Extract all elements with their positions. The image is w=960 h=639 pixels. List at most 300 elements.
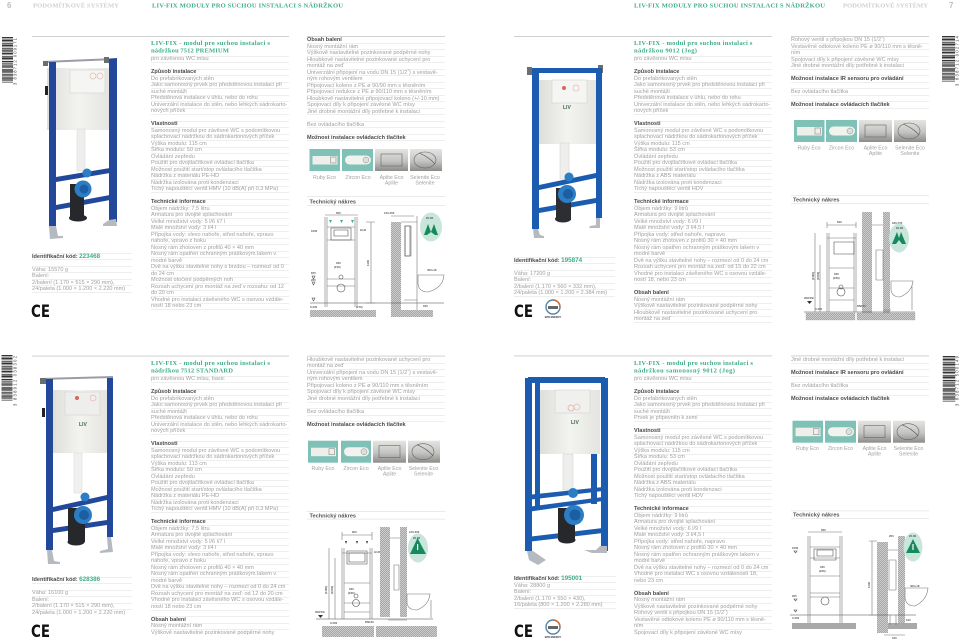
description column: Samonosný modul pro závěsné WC s podomítkovou	[151, 128, 280, 134]
identification block	[32, 570, 132, 616]
description column: Nádržka izolována proti kondenzaci	[151, 500, 239, 506]
barcode: 3 838712 002714	[954, 35, 960, 86]
certification badge	[545, 620, 562, 639]
package contents continued column: Hloubkově nastavitelné pozinkované uchycení pro	[307, 356, 430, 362]
description column: Způsob instalace	[151, 69, 196, 75]
description column: Malé množství vody: 3 l/4 l	[151, 225, 216, 231]
description column: Rohový ventil s připojkou DN 15 (1/2˝)	[634, 610, 728, 616]
heading: LIV-FIX - modul pro suchou instalaci s	[634, 360, 753, 367]
package contents continued column: Bez ovládacího tlačítka	[791, 89, 848, 95]
Selenite Eco: Selenite Eco	[895, 146, 925, 152]
technical drawing: 220	[311, 278, 316, 282]
technical drawing	[804, 212, 915, 320]
description column: Přípojka vody: vlevo nahoře, střed nahoře, vpravo	[151, 552, 273, 558]
identification block: Váha: 17200 g	[514, 270, 550, 276]
package contents continued column: Jiné drobné montážní díly potřebné k instalaci	[791, 63, 904, 69]
description column: montáž na zeď	[634, 316, 671, 322]
description column: Tichý napouštěcí ventil HMV (10 dB(A) při 0,3 MPa)	[151, 186, 278, 192]
identification block: Identifikační kód: 223468	[32, 252, 100, 260]
technical drawing: (1000)	[330, 586, 334, 594]
package contents column: Možnost instalace ovládacích tlačítek	[307, 134, 406, 140]
barcode: 3 838712 500149	[954, 355, 960, 406]
description column: Univerzální instalace do stěn, nebo lehkých sádrokarto-	[634, 102, 770, 108]
technical drawing heading: Technický nákres	[793, 513, 840, 519]
identification block: 16/paleta (800 × 1.200 × 2.280 mm)	[514, 602, 603, 608]
description column: Obsah balení	[151, 616, 186, 622]
panel: LIV-FIX 7512 STANDARD	[2, 355, 445, 639]
product image: mounting frame	[525, 377, 608, 565]
technical drawing heading	[791, 511, 929, 519]
description column: Velké množství vody: 6 l/9 l	[634, 526, 701, 532]
description column: Univerzální instalace do stěn, nebo lehkých sádrokarto-	[151, 422, 287, 428]
product image: mounting frame	[40, 376, 113, 564]
identification block: Identifikační kód: 195874	[514, 256, 582, 264]
description column: modré barvě	[634, 558, 665, 564]
description column: Přípojka vody: vlevo nahoře, střed nahoře, vpravo	[151, 232, 273, 238]
barcode	[7, 355, 18, 406]
description column: Nosný rám opatřen ochranným práškovým lakem v	[634, 244, 759, 250]
Selenite Eco	[893, 421, 925, 458]
technical drawing heading	[307, 511, 445, 520]
technical drawing: (≥70)	[356, 305, 363, 309]
product image: mounting frame: LIV	[79, 422, 87, 428]
package contents continued column: Možnost instalace IR sensoru pro ovládání	[791, 76, 904, 82]
identification block: 24/paleta (1.000 × 1.200 × 2.384 mm)	[514, 290, 607, 296]
Ruby Eco: Ruby Eco	[796, 446, 819, 452]
Ruby Eco: Ruby Eco	[312, 466, 335, 472]
description column: Objem nádržky: 9 litrů	[634, 512, 688, 518]
identification block: 2/balení (1.170 × 550 × 430),	[514, 596, 586, 602]
description column: Vhodné pro instalaci závěsného WC s osovou vzdále-	[151, 597, 284, 603]
Aplite Eco: Aplite Eco	[378, 466, 401, 472]
package contents column: Připojovací koleno z PE ø 90/90 mm s těsněním	[307, 82, 425, 88]
identification block	[32, 247, 132, 292]
heading	[634, 40, 753, 55]
technical drawing: 180	[349, 587, 354, 591]
package contents continued column: Bez ovládacího tlačítka	[791, 382, 848, 388]
package contents continued column	[307, 356, 445, 428]
description column: Dvě na výšku stavitelné nohy – rozmezí od 0 do 24 cm	[151, 584, 285, 590]
package contents column: ným rohovým ventilem	[307, 76, 362, 82]
Selenite Eco: Selenite	[900, 151, 920, 157]
barcode	[948, 35, 960, 86]
description column: Dvě na výšku stavitelné nohy – rozmezí od 0 do 24 cm	[634, 258, 768, 264]
control buttons	[308, 441, 440, 478]
description column: Vhodné pro instalaci závěsného WC s osovou vzdále-	[151, 296, 284, 302]
description column: Nádržka z ABS materiálu	[634, 173, 696, 179]
package contents column: Hloubkově nastavitelné připojovací koleno (+/-10 mm)	[307, 96, 439, 102]
description column: Nosný rám zhotoven z profilů 40 × 40 mm	[151, 244, 254, 250]
description column: Technické informace	[151, 199, 206, 205]
page number 7: 7	[949, 1, 954, 10]
description column: suché montáži	[634, 88, 670, 94]
description column: Nosný rám opatřen ochranným práškovým lakem v	[634, 552, 759, 558]
description column: Šířka modulu: 50 cm	[151, 147, 202, 153]
description column: Použití pro dvojtlačítkové ovládací tlačítka	[151, 480, 254, 486]
description column: ností 18 nebo 23 cm	[151, 303, 201, 309]
package contents continued column: Možnost instalace IR sensoru pro ovládání	[791, 370, 904, 376]
description column: Možnost otočení podpěrných noh	[151, 277, 233, 283]
description column: Do prefabrikovaných stěn	[151, 76, 214, 82]
description column: suché montáži	[151, 408, 187, 414]
description column: Možnost použití start/stop ovládacího tlačítka	[634, 166, 745, 172]
description column: Vlastnosti	[151, 441, 178, 447]
identification block: Balení:	[32, 273, 49, 279]
package contents continued column: Možnost instalace ovládacích tlačítek	[307, 422, 406, 428]
technical drawing: G1/2	[360, 228, 367, 232]
identification block: Identifikační kód: 628386	[32, 576, 100, 583]
package contents continued column: Spojovací díly k připojení závěsné WC mísy	[307, 389, 415, 395]
description column: Výškově nastavitelné pozinkované podpěrné nohy	[151, 630, 274, 636]
description column: Možnost použití start/stop ovládacího tlačítka	[151, 486, 262, 492]
description column: Vhodné pro instalaci WC s osovou vzdáleností 18,	[634, 571, 758, 577]
technical drawing	[315, 527, 437, 637]
description column: Nádržka z materiálu PE-HD	[151, 173, 219, 179]
package contents continued column: Jiné drobné montážní díly potřebné k instalaci	[791, 356, 904, 362]
package contents continued column: ným rohovým ventilem	[307, 376, 362, 382]
heading	[151, 40, 270, 55]
description column: Malé množství vody: 3 l/4,5 l	[634, 532, 704, 538]
description column: ním	[634, 623, 643, 629]
description column: do 20 cm	[151, 290, 174, 296]
description column: Šířka modulu: 53 cm	[634, 454, 685, 460]
description column: Použití pro dvojtlačítkové ovládací tlačítka	[634, 160, 737, 166]
Selenite Eco: Selenite Eco	[894, 446, 923, 452]
description column: Do prefabrikovaných stěn	[634, 396, 697, 402]
certification badge: EPD ENERGY	[545, 316, 562, 319]
control buttons	[792, 421, 925, 458]
description column: Způsob instalace	[634, 389, 679, 395]
product image: mounting frame	[43, 57, 117, 239]
description column: Univerzální instalace do stěn, nebo lehkých sádrokarto-	[151, 102, 287, 108]
package contents continued column: Rohový ventil s připojkou DN 15 (1/2˝)	[791, 37, 885, 43]
package contents column: Připojovací redukce z PE ø 90/110 mm s těsněním	[307, 89, 431, 95]
description column: modré barvě	[151, 258, 182, 264]
description column: nových příček	[634, 108, 668, 114]
package contents column: Bez ovládacího tlačítka	[307, 122, 364, 128]
description column: Nosný rám zhotoven z profilů 30 × 40 mm	[634, 545, 737, 551]
Selenite Eco: Selenite	[899, 452, 918, 458]
package contents column: montáž na zeď	[307, 63, 344, 69]
barcode: 3 838712 009171	[12, 37, 18, 85]
panel: LIV-FIX 9012 (Jog)	[514, 35, 960, 323]
description column: Nosný rám opatřen ochranným práškovým lakem v	[151, 571, 276, 577]
technical drawing: OKFFB	[315, 610, 325, 614]
description column: Malé množství vody: 3 l/4,5 l	[634, 225, 704, 231]
description column: Jako samonosný prvek pro předstěnovou instalaci při	[634, 402, 765, 408]
top rules	[514, 355, 929, 356]
description column: Nádržka izolována proti kondenzaci	[634, 486, 722, 492]
Aplite Eco: Aplite	[869, 151, 882, 157]
top rules	[514, 36, 929, 37]
Aplite Eco	[373, 441, 406, 478]
Selenite Eco: Selenite	[414, 472, 433, 478]
package contents continued column: Jiné drobné montážní díly potřebné k instalaci	[307, 396, 420, 402]
identification block	[514, 251, 615, 296]
package contents continued column: Možnost instalace ovládacích tlačítek	[791, 102, 890, 108]
description column: Jako samonosný prvek pro předstěnovou instalaci při	[151, 402, 282, 408]
description column: Přípojka vody: střed nahoře, napravo	[634, 538, 725, 544]
description column: nových příček	[151, 428, 185, 434]
description column: Nosný rám opatřen ochranným práškovým lakem v	[151, 251, 276, 257]
description column: Tichý napouštěcí ventil HDV	[634, 493, 703, 499]
control buttons	[310, 149, 442, 187]
package contents continued column: Připojovací koleno z PE ø 90/110 mm s těsněním	[307, 382, 428, 388]
description column: Technické informace	[634, 506, 689, 512]
description column: Objem nádržky: 9 litrů	[634, 206, 688, 212]
description column: Objem nádržky: 7,5 litru	[151, 206, 210, 212]
chapter title right: LIV-FIX MODULY PRO SUCHOU INSTALACI S NÁDRŽKOU	[634, 2, 825, 10]
technical drawing: DN100	[365, 620, 374, 624]
technical drawing	[790, 528, 928, 639]
description column: Technické informace	[634, 199, 689, 205]
description column: nahoře, vpravo z boku	[151, 558, 206, 564]
description column: Jako samonosný prvek pro předstěnovou instalaci při	[151, 82, 282, 88]
technical drawing: DN100	[857, 304, 866, 308]
description column: Nádržka izolována proti kondenzaci	[634, 180, 722, 186]
heading	[151, 360, 270, 374]
technical drawing: 180	[336, 261, 341, 265]
identification block: 2/balení (1.170 × 515 × 290 mm),	[32, 280, 114, 286]
description column: splachovací nádržkou do sádrokartonových příček	[634, 441, 757, 447]
description column: Ovládání zepředu	[634, 154, 678, 160]
description column: Nosný rám zhotoven z profilů 30 × 40 mm	[634, 238, 737, 244]
identification block: Váha: 28800 g	[514, 582, 550, 588]
description column: pro závěsnou WC mísu	[634, 56, 692, 62]
description column: Předstěnová instalace v úhlu, nebo do rohu	[151, 415, 258, 421]
Selenite Eco	[894, 120, 926, 157]
description column: Ovládání zepředu	[151, 474, 195, 480]
description column: Objem nádržky: 7,5 litru	[151, 526, 210, 532]
barcode: 3 838912 038302	[12, 355, 18, 406]
Aplite Eco: Aplite Eco	[863, 446, 886, 452]
description column: Technické informace	[151, 519, 206, 525]
technical drawing: 20-80	[426, 216, 434, 220]
technical drawing heading: Technický nákres	[310, 514, 356, 520]
heading: nádržkou 7512 PREMIUM	[151, 48, 230, 55]
identification block: Balení:	[514, 277, 531, 283]
description column: Do prefabrikovaných stěn	[634, 76, 697, 82]
description column: Výška modulu: 115 cm	[634, 448, 690, 454]
description column: nových příček	[151, 108, 185, 114]
description column	[634, 50, 772, 322]
description column: Velké množství vody: 6 l/9 l	[634, 218, 701, 224]
description column: Předstěnová instalace v úhlu, nebo do rohu	[151, 95, 258, 101]
package contents column: Hloubkově nastavitelné pozinkované uchycení pro	[307, 56, 430, 62]
technical drawing: 225	[792, 594, 797, 598]
technical drawing: 200	[889, 534, 894, 538]
technical drawing: 1130	[366, 259, 370, 266]
description column: Velké množství vody: 5 l/6 l/7 l	[151, 538, 225, 544]
package contents continued column: Bez ovládacího tlačítka	[307, 408, 364, 414]
Aplite Eco	[859, 120, 892, 157]
package contents column: Výškově nastavitelné pozinkované podpěrné nohy	[307, 50, 430, 56]
description column: pro závěsnou WC mísu	[151, 56, 209, 62]
package contents continued column: Vestavěné odtokové koleno PE ø 90/110 mm s těsně-	[791, 44, 923, 50]
description column: Prvek je připevněn k zemi	[634, 415, 698, 421]
description column: Rozsah uchycení pro montáž na zeď v rozsahu: od 12	[151, 284, 284, 290]
description column: ností 18 nebo 23 cm	[151, 604, 201, 610]
technical drawing: 400+18	[427, 268, 437, 272]
package contents column	[307, 37, 445, 141]
description column: Způsob instalace	[634, 69, 679, 75]
description column: Samonosný modul pro závěsné WC s podomítkovou	[634, 434, 763, 440]
description column: Vhodné pro instalaci závěsného WC s osovou vzdále-	[634, 270, 767, 276]
Selenite Eco: Selenite Eco	[410, 175, 440, 181]
technical drawing: 870	[311, 271, 316, 275]
technical drawing: 180-200	[892, 221, 903, 225]
control buttons	[794, 120, 926, 157]
technical drawing: 600	[352, 530, 357, 534]
description column: Možnost použití start/stop ovládacího tlačítka	[151, 166, 262, 172]
description column: Ovládání zepředu	[151, 154, 195, 160]
product image: mounting frame: LIV	[563, 105, 571, 111]
package contents column: Jiné drobné montážní díly potřebné k instalaci	[307, 108, 420, 114]
Aplite Eco	[375, 149, 408, 187]
barcode	[8, 37, 18, 85]
package contents column: Spojovací díly k připojení závěsné WC mísy	[307, 102, 415, 108]
heading: nádržkou 7512 STANDARD	[151, 367, 233, 374]
package contents continued column: montáž na zeď	[307, 363, 344, 369]
description column: Způsob instalace	[151, 389, 196, 395]
description column: Do prefabrikovaných stěn	[151, 396, 214, 402]
heading: LIV-FIX - modul pro suchou instalaci s	[634, 40, 753, 47]
technical drawing heading: Technický nákres	[310, 200, 356, 206]
package contents continued column	[791, 37, 929, 108]
top rules	[32, 36, 445, 37]
description column: Armatura pro dvojité splachování	[634, 212, 715, 218]
Aplite Eco: Aplite Eco	[380, 175, 403, 181]
heading: nádržkou samonosný 9012 (Jog)	[634, 367, 735, 374]
description column: Spojovací díly k připojení závěsné WC mísy	[634, 630, 742, 636]
technical drawing: G1/2	[374, 550, 381, 554]
technical drawing heading	[307, 196, 445, 206]
identification block: Balení:	[514, 589, 531, 595]
Ruby Eco: Ruby Eco	[313, 175, 336, 181]
Aplite Eco	[858, 421, 891, 458]
description column: modré barvě	[151, 578, 182, 584]
description column: Tichý napouštěcí ventil HDV	[634, 186, 703, 192]
description column	[151, 370, 289, 636]
technical drawing: 0-200	[815, 307, 823, 311]
description column: pro závěsnou WC mísu	[634, 376, 692, 382]
technical drawing: 120-200	[409, 530, 420, 534]
description column: Armatura pro dvojité splachování	[151, 532, 232, 538]
heading	[634, 360, 753, 374]
description column: Obsah balení	[634, 290, 669, 296]
package contents continued column: Spojovací díly k připojení závěsné WC mísy	[791, 56, 899, 62]
description column: Výška modulu: 115 cm	[151, 140, 207, 146]
Zircon Eco: Zircon Eco	[345, 175, 371, 181]
description column: Dvě na výšku stavitelné nohy – rozmezí od 0 do 24 cm	[634, 564, 768, 570]
description column: Šířka modulu: 53 cm	[634, 147, 685, 153]
description column: Vlastnosti	[151, 121, 178, 127]
section title right: PODOMÍTKOVÉ SYSTÉMY	[843, 2, 928, 10]
technical drawing: 500	[336, 211, 341, 215]
page header	[7, 1, 954, 10]
certification badge: EPD ENERGY	[545, 636, 562, 639]
technical drawing: OKFFB	[804, 296, 814, 300]
description column: Malé množství vody: 3 l/4 l	[151, 545, 216, 551]
technical drawing: (210)	[334, 265, 341, 269]
description column: Výškově nastavitelné pozinkované podpěrné nohy	[634, 604, 757, 610]
identification block: Váha: 16100 g	[32, 590, 68, 596]
identification block: 24/paleta (1.000 × 1.200 × 2.220 mm)	[32, 286, 125, 292]
description column: splachovací nádržkou do sádrokartonových příček	[151, 134, 274, 140]
package contents column: Univerzální připojení na vodu DN 15 (1/2˝) s vestavě-	[307, 70, 438, 76]
Zircon Eco: Zircon Eco	[343, 466, 369, 472]
identification block: Balení:	[32, 596, 49, 602]
description column: Vlastnosti	[634, 121, 661, 127]
description column	[634, 370, 772, 636]
technical drawing: 0-240	[310, 305, 318, 309]
technical drawing: 120-200	[384, 211, 395, 215]
package contents column: Nosný montážní rám	[307, 44, 358, 50]
description column: Hloubkově nastavitelné pozinkované uchycení pro	[634, 310, 757, 316]
technical drawing: (1000)	[816, 272, 820, 280]
description column: Ovládání zepředu	[634, 460, 678, 466]
description column: Armatura pro dvojité splachování	[151, 212, 232, 218]
technical drawing: 100	[906, 618, 911, 622]
chapter title left: LIV-FIX MODULY PRO SUCHOU INSTALACI S NÁDRŽKOU	[152, 2, 343, 10]
technical drawing	[310, 211, 444, 317]
description column: splachovací nádržkou do sádrokartonových příček	[634, 134, 757, 140]
description column: Vestavěné odtokové koleno PE ø 90/110 mm s těsně-	[634, 616, 766, 622]
technical drawing: (230)	[348, 591, 355, 595]
identification block: 2/balení (1.170 × 515 × 290 mm),	[32, 603, 114, 609]
description column: Velké množství vody: 5 l/6 l/7 l	[151, 218, 225, 224]
identification block: 2/balení (1.170 × 560 × 332 mm),	[514, 284, 596, 290]
description column: Rozsah uchycení pro montáž na zeď: od 15 do 22 cm	[634, 264, 766, 270]
panel: LIV-FIX samonosný 9012 (Jog)	[514, 355, 960, 639]
description column: Armatura pro dvojité splachování	[634, 519, 715, 525]
Zircon Eco: Zircon Eco	[829, 146, 854, 152]
Selenite Eco	[410, 149, 442, 187]
package contents continued column	[791, 356, 929, 402]
product image: mounting frame	[527, 65, 603, 238]
Aplite Eco: Aplite Eco	[864, 146, 887, 152]
page number 6: 6	[7, 1, 12, 10]
identification block	[514, 570, 616, 608]
Selenite Eco: Selenite Eco	[409, 466, 438, 472]
technical drawing: (230)	[833, 276, 840, 280]
identification block: Váha: 15570 g	[32, 266, 68, 272]
description column: Použití pro dvojtlačítkové ovládací tlačítka	[151, 160, 254, 166]
technical drawing: 640	[837, 220, 842, 224]
technical drawing: 0-200	[330, 621, 338, 625]
Zircon Eco: Zircon Eco	[828, 446, 853, 452]
description column: Jako samonosný prvek pro předstěnovou instalaci při	[634, 82, 765, 88]
heading: LIV-FIX - modul pro suchou instalaci s	[151, 360, 270, 367]
technical drawing: 180	[834, 272, 839, 276]
description column: Tichý napouštěcí ventil HMV (10 dB(A) při 0,3 MPa)	[151, 506, 278, 512]
description column: Nosný montážní rám	[151, 623, 202, 629]
technical drawing: 400+18	[910, 584, 920, 588]
description column: Přípojka vody: střed nahoře, napravo	[634, 232, 725, 238]
technical drawing: 0-200	[792, 616, 800, 620]
panel: LIV-FIX 7512 PREMIUM	[2, 36, 445, 322]
description column: Samonosný modul pro závěsné WC s podomítkovou	[634, 128, 763, 134]
package contents continued column: ním	[791, 50, 800, 56]
description column: Možnost použití start/stop ovládacího tlačítka	[634, 474, 745, 480]
Aplite Eco: Aplite	[385, 181, 398, 187]
technical drawing: 1000	[792, 546, 799, 550]
technical drawing: 20-80	[909, 534, 917, 538]
description column: Rozsah uchycení pro montáž na zeď: od 12 do 20 cm	[151, 590, 283, 596]
section title left: PODOMÍTKOVÉ SYSTÉMY	[33, 2, 119, 10]
CE mark: CE	[31, 302, 50, 322]
description column: Výškově nastavitelné pozinkované podpěrné nohy	[634, 303, 757, 309]
